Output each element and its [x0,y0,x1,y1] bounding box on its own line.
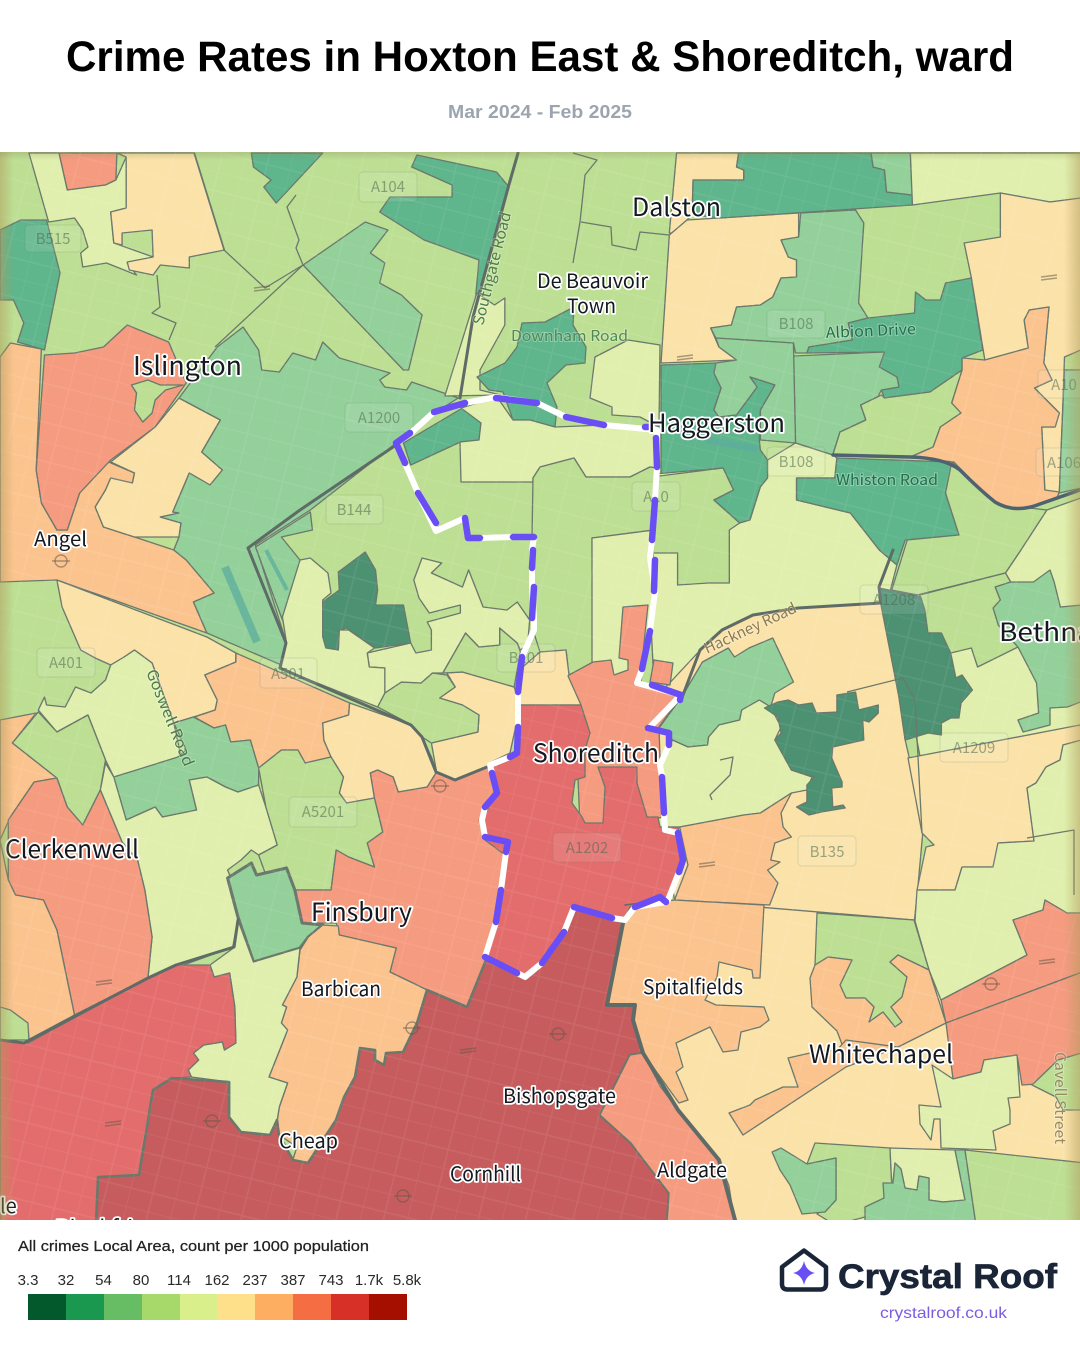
choropleth regions west [0,153,530,1225]
legend tick values: 1.7k [355,1272,384,1289]
road number badges: A1200 [358,407,400,428]
road number badges: A501 [271,663,305,684]
place labels: Finsbury [311,893,412,929]
place labels: Clerkenwell [5,830,139,866]
road number badges: B515 [36,228,70,249]
logo: Crystal Roof [782,1250,1058,1322]
choropleth regions east [643,153,1080,920]
legend tick values: 743 [318,1272,344,1289]
subtitle: date range: Mar 2024 - Feb 2025 [448,101,632,122]
road name labels: Whiston Road [836,469,938,490]
base area: south-east pale orange [640,900,1080,1220]
choropleth regions centre and south [96,307,1080,1225]
road number badges: B144 [337,499,371,520]
road number badges: B101 [509,647,543,668]
legend colour scale [28,1294,407,1320]
place labels: Aldgate [657,1154,727,1183]
road number badges: A104 [371,176,405,197]
road name labels: Downham Road [511,325,628,346]
website link: crystalroof.co.uk [880,1305,1008,1322]
canal strips [225,440,757,642]
main roads [0,153,1080,1220]
legend tick values: 5.8k [393,1272,422,1289]
road name labels: Southgate Road [467,210,516,327]
road name labels: Albion Drive [825,318,916,343]
road number badges: B135 [810,841,844,862]
road number badges: A401 [49,652,83,673]
legend [18,1238,422,1320]
place labels: Whitechapel [809,1035,953,1071]
place labels: Islington [133,346,242,383]
road name labels: Hackney Road [700,597,800,659]
place labels: Barbican [301,973,381,1002]
faint street network overlay [0,152,1080,1220]
legend tick values: 387 [280,1272,306,1289]
ward dashes purple [396,398,683,973]
place labels: Dalston [632,188,721,224]
place labels: le [0,1190,17,1219]
legend tick values [18,1272,422,1289]
title: Crime Rates in Hoxton East & Shoreditch, ward [66,33,1014,81]
legend tick values: 80 [133,1272,149,1289]
road name labels [141,210,1071,1144]
road number badges: A10 [643,486,669,507]
map edge fade [0,152,1080,1220]
logo wordmark: Crystal Roof [838,1258,1058,1296]
transport station icons [52,275,1057,1202]
road number badges: A1209 [953,737,995,758]
place labels: Cornhill [450,1158,521,1187]
road name labels: Goswell Road [141,666,199,769]
place labels [0,188,1080,1243]
road number badges: A5201 [302,801,344,822]
place labels: Town [567,290,616,319]
ward-boundary outlines and minor lines [152,153,1074,895]
road number badges: B108 [779,313,813,334]
ward boundary: Hoxton East and Shoreditch [396,397,683,977]
place labels: De Beauvoir [537,265,648,294]
icon: house with star [782,1250,826,1290]
place labels: Blackfriars [55,1211,164,1243]
legend tick values: 114 [167,1272,191,1289]
place labels: Angel [34,523,87,552]
place labels: Haggerston [648,404,785,440]
legend tick values: 162 [204,1272,230,1289]
legend tick values: 32 [58,1272,74,1289]
place labels: Spitalfields [643,971,743,1000]
ward outline white [396,397,683,977]
road name labels: Cavell Street [1050,1052,1071,1144]
road number badges [25,172,1080,866]
legend tick values: 237 [242,1272,268,1289]
road number badges: A1202 [566,837,608,858]
place labels: Cheap [279,1125,338,1154]
legend tick values: 54 [95,1272,112,1289]
road number badges: B108 [779,451,813,472]
road number badges: A10 [1051,374,1077,395]
legend tick values: 3.3 [18,1272,38,1289]
place labels: Shoreditch [533,734,659,770]
road number badges: A1208 [873,589,915,610]
legend title: All crimes Local Area, count per 1000 population [18,1238,369,1255]
place labels: Bishopsgate [503,1080,616,1109]
